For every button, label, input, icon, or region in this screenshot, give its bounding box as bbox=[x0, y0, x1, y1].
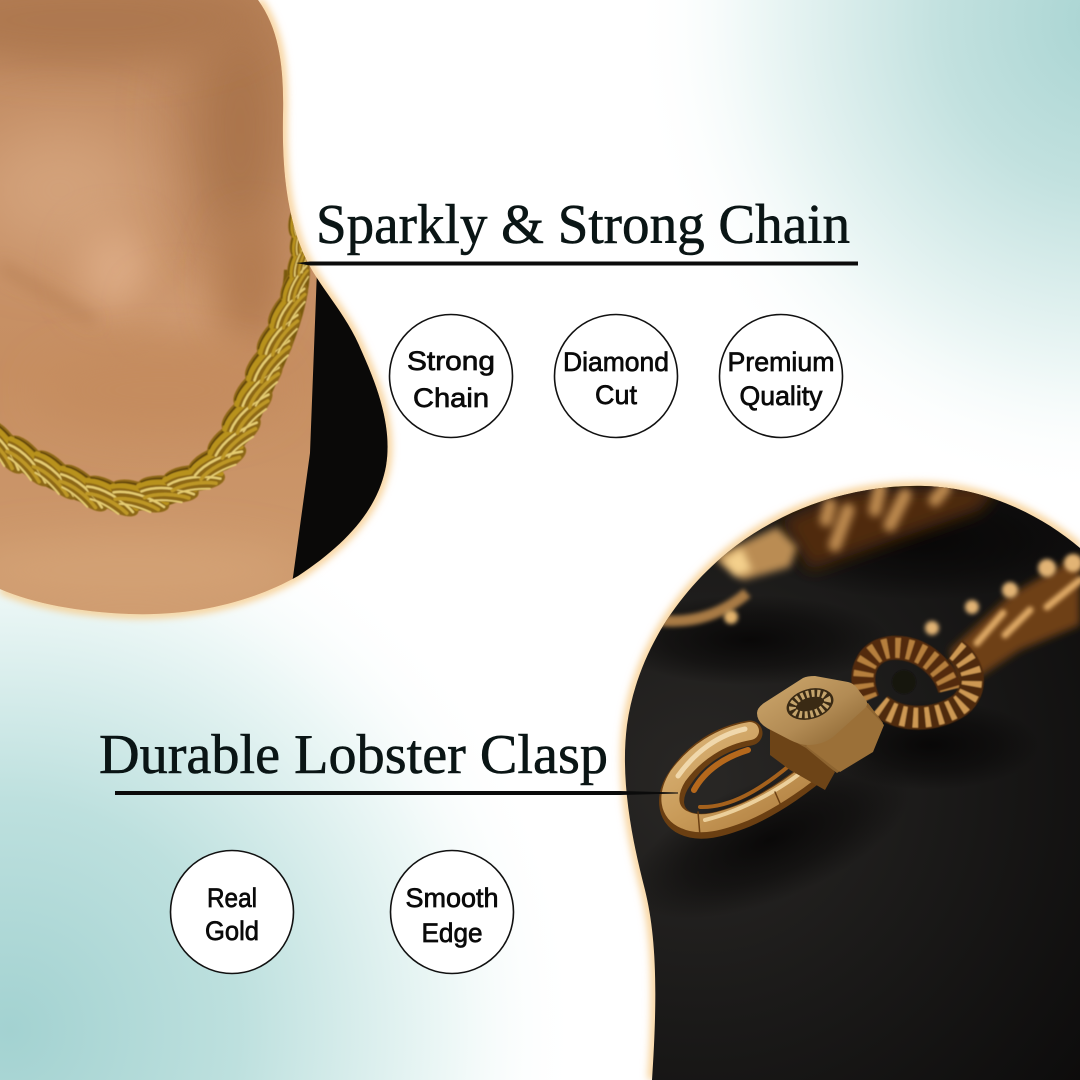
soft shadows bbox=[645, 496, 1068, 899]
feature badge: Smooth Edge: Edge bbox=[422, 918, 482, 948]
photo: lobster clasp on dark leather bbox=[600, 470, 1080, 1080]
heading: Durable Lobster Clasp: Durable Lobster Clasp bbox=[99, 724, 608, 786]
feature badge: Premium Quality: Premium bbox=[728, 347, 834, 377]
feature badge: Diamond Cut bbox=[554, 314, 678, 438]
skin shading bbox=[0, 0, 300, 600]
feature badge: Real Gold: Gold bbox=[205, 916, 259, 946]
gold rope chain bbox=[0, 202, 317, 526]
clasp loop bbox=[670, 729, 825, 836]
leader line: chain bbox=[296, 262, 858, 266]
clasp body bbox=[757, 676, 884, 790]
photo: necklace on neck bbox=[0, 0, 400, 620]
heading: Sparkly & Strong Chain: Sparkly & Strong Chain bbox=[316, 194, 850, 256]
photo glow: clasp blob bbox=[625, 486, 1080, 1080]
blurred right chain bbox=[925, 554, 1080, 690]
feature badge: Strong Chain: Strong bbox=[407, 346, 495, 376]
blurred back chain and clasp bbox=[657, 484, 1000, 624]
feature badge: Premium Quality bbox=[720, 314, 842, 438]
feature badge: Smooth Edge bbox=[390, 850, 514, 974]
feature badge: Real Gold bbox=[170, 850, 294, 974]
feature badge: Diamond Cut: Diamond bbox=[563, 347, 669, 377]
feature badge: Real Gold: Real bbox=[207, 883, 257, 913]
twisted chain links bbox=[863, 648, 972, 718]
feature badge: Strong Chain bbox=[390, 314, 512, 438]
feature badge: Strong Chain: Chain bbox=[413, 383, 489, 413]
leader line: clasp bbox=[115, 791, 678, 795]
feature badge: Premium Quality: Quality bbox=[740, 381, 823, 411]
feature badge: Diamond Cut: Cut bbox=[595, 380, 637, 410]
photo glow: necklace blob bbox=[0, 0, 388, 614]
feature badge: Smooth Edge: Smooth bbox=[406, 883, 498, 913]
black top bbox=[292, 278, 388, 579]
engraved seal bbox=[786, 688, 834, 720]
